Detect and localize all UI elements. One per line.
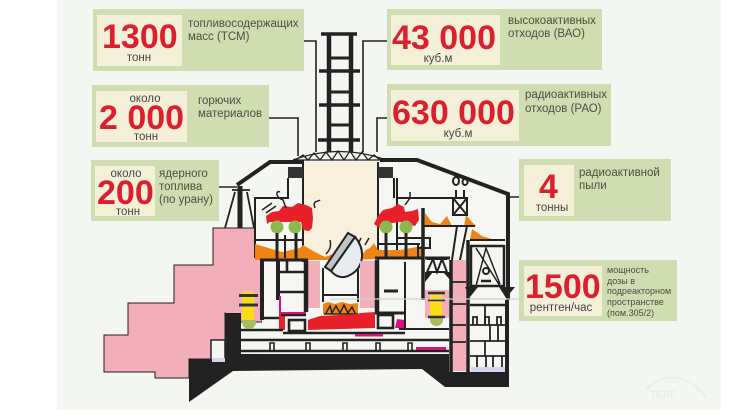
- callout: 630000 cubic meters: радиоактивных: [525, 89, 607, 101]
- callout: 1300 tons: тонн: [127, 52, 151, 64]
- white interior spaces: [255, 198, 303, 258]
- green reactor heads: [270, 220, 284, 234]
- callout: 43000 cubic meters: отходов (ВАО): [508, 28, 585, 40]
- callout: 2000 tons: [92, 85, 269, 147]
- left lower rooms: [241, 260, 449, 351]
- roof: [237, 162, 304, 185]
- callout: 1500 roentgen per hour: подреакторном: [607, 286, 671, 296]
- white room under the cascade: [211, 340, 225, 360]
- callout: 4 tons: тонны: [536, 202, 568, 214]
- callout: 43000 cubic meters: высокоактивных: [508, 15, 596, 27]
- cable squiggles: [262, 192, 410, 254]
- black foundation: [189, 300, 509, 402]
- callout: 4 tons: пыли: [579, 180, 607, 192]
- callout: 200 tons: около: [111, 168, 141, 180]
- callout: 1500 roentgen per hour: дозы в: [607, 276, 635, 286]
- lower small cells: [270, 262, 449, 351]
- left ventilation block: [225, 162, 397, 262]
- callout: 630000 cubic meters: куб.м: [444, 128, 472, 140]
- magenta residue: [280, 296, 306, 313]
- reactor lid (upper biological shield): [325, 233, 362, 277]
- cream reactor hall: [304, 162, 378, 262]
- callout: 630000 cubic meters: 630 000: [392, 94, 515, 132]
- callout: 1500 roentgen per hour: рентген/час: [530, 302, 592, 314]
- measurement line: [330, 298, 520, 300]
- right lower cells: [470, 305, 505, 371]
- callout: 2000 tons: около: [130, 93, 160, 105]
- callout: 1500 roentgen per hour: пространстве: [607, 297, 664, 307]
- red molten fuel pool: [279, 313, 285, 330]
- ventilation stack: [318, 34, 360, 152]
- callout: 4 tons: 4: [539, 168, 558, 206]
- right pink column: [451, 240, 468, 372]
- callout: 200 tons: 200: [97, 174, 154, 212]
- building cross-section diagram: [104, 34, 520, 402]
- callout: 200 tons: [91, 160, 219, 221]
- checker blocks: [288, 167, 303, 178]
- callout: 1500 roentgen per hour: (пом.305/2): [607, 308, 654, 318]
- callout: 1300 tons: масс (ТСМ): [188, 31, 250, 43]
- black support triangles: [425, 272, 433, 282]
- orange debris layer: [255, 243, 422, 260]
- callout: 1300 tons: 1300: [102, 18, 178, 56]
- callout: 630000 cubic meters: [387, 84, 611, 146]
- callout: 1500 roentgen per hour: 1500: [525, 268, 601, 306]
- watermark logo: [646, 377, 706, 401]
- callout: 4 tons: радиоактивной: [579, 167, 660, 179]
- watermark logo: ТЕЛЕ: [650, 390, 677, 401]
- callout: 1500 roentgen per hour: мощность: [607, 265, 649, 275]
- reactor shaft: [306, 260, 377, 313]
- callout: 200 tons: ядерного: [159, 168, 208, 180]
- left fuel assembly: yellow reactor element: [239, 292, 258, 329]
- callout: 630000 cubic meters: отходов (РАО): [525, 103, 602, 115]
- callout: 200 tons: (по урану): [159, 194, 213, 206]
- callout: 2000 tons: материалов: [198, 108, 262, 120]
- callout: 200 tons: тонн: [116, 206, 140, 218]
- lavender floor residue: [471, 367, 505, 372]
- right fuel assembly: yellow reactor element: [425, 290, 449, 326]
- machine room with crane: [471, 246, 504, 286]
- right upper structure: [397, 177, 505, 300]
- callout: 1300 tons: [93, 9, 304, 71]
- callout: 1300 tons: топливосодержащих: [188, 18, 299, 30]
- callout: 2000 tons: 2 000: [99, 99, 184, 137]
- callout: 43000 cubic meters: 43 000: [392, 19, 496, 57]
- red fuel masses: [266, 203, 313, 231]
- orange lava fire: [323, 302, 358, 314]
- callout: 2000 tons: тонн: [134, 131, 158, 143]
- callout: 4 tons: [519, 159, 671, 221]
- service pipes and galleries: [255, 233, 430, 260]
- callout: 2000 tons: горючих: [198, 95, 242, 107]
- callout: 43000 cubic meters: [387, 9, 602, 70]
- callout: 43000 cubic meters: куб.м: [424, 53, 452, 65]
- callout: 200 tons: топлива: [159, 181, 203, 193]
- callout: 1500 roentgen per hour: [519, 260, 677, 321]
- pink concrete cascade wall: [104, 228, 262, 378]
- leader lines: [219, 41, 519, 197]
- funnel supports: [465, 287, 478, 297]
- roof truss: [293, 151, 386, 160]
